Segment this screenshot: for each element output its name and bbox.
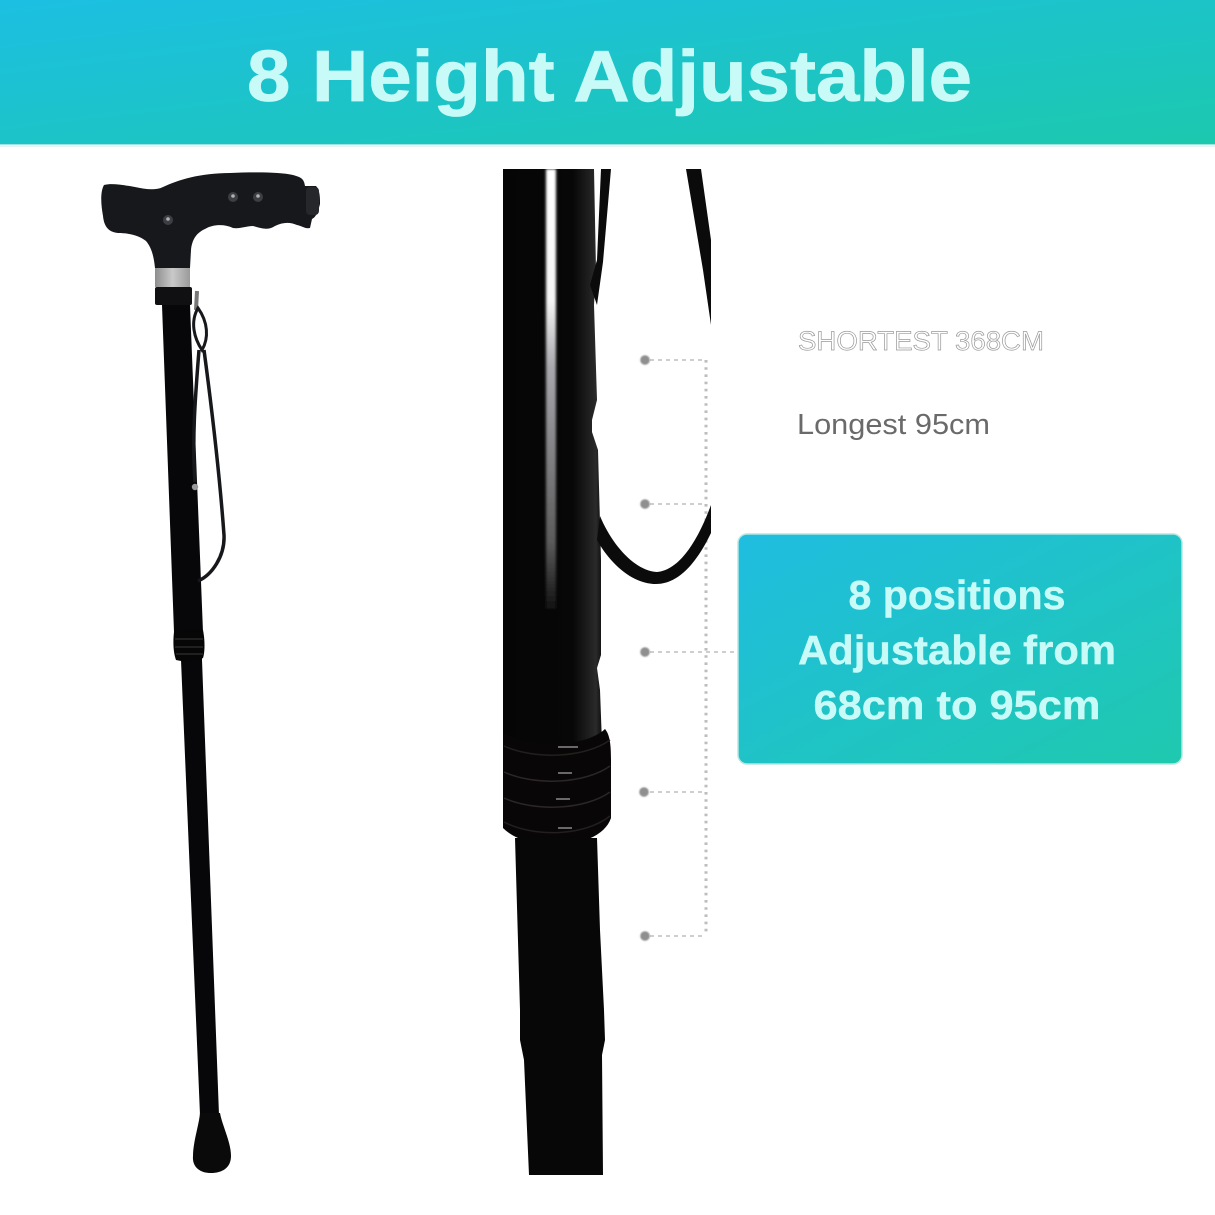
cane shaft: [162, 305, 219, 1115]
callout text: Adjustable from: [798, 627, 1116, 673]
height collar: [173, 629, 204, 661]
ergonomic handle: [101, 172, 320, 268]
marker dots: [640, 355, 650, 365]
lock button: [192, 484, 198, 490]
black neck ring: [155, 287, 192, 305]
header banner: [0, 0, 1215, 147]
rubber tip: [193, 1113, 231, 1173]
callout text: 8 positions: [848, 572, 1066, 618]
longest length label: Longest 95cm: [797, 409, 990, 441]
title: 8 Height Adjustable: [247, 37, 972, 117]
close-up collar: [503, 729, 611, 845]
callout text: 68cm to 95cm: [814, 682, 1100, 728]
shortest length label: SHORTEST 368CM: [798, 326, 1044, 356]
close-up lower shaft: [515, 838, 605, 1175]
height position markers: [639, 355, 738, 941]
close-up upper shaft: [503, 169, 603, 770]
wrist strap: [194, 291, 224, 581]
close-up strap: [590, 169, 711, 584]
silver adjustment band: [155, 268, 190, 287]
shaft highlight: [546, 169, 556, 609]
close-up cane illustration: [503, 169, 711, 1175]
callout box: [738, 534, 1182, 764]
full cane product illustration: [101, 172, 320, 1173]
callout text: [798, 572, 1116, 728]
